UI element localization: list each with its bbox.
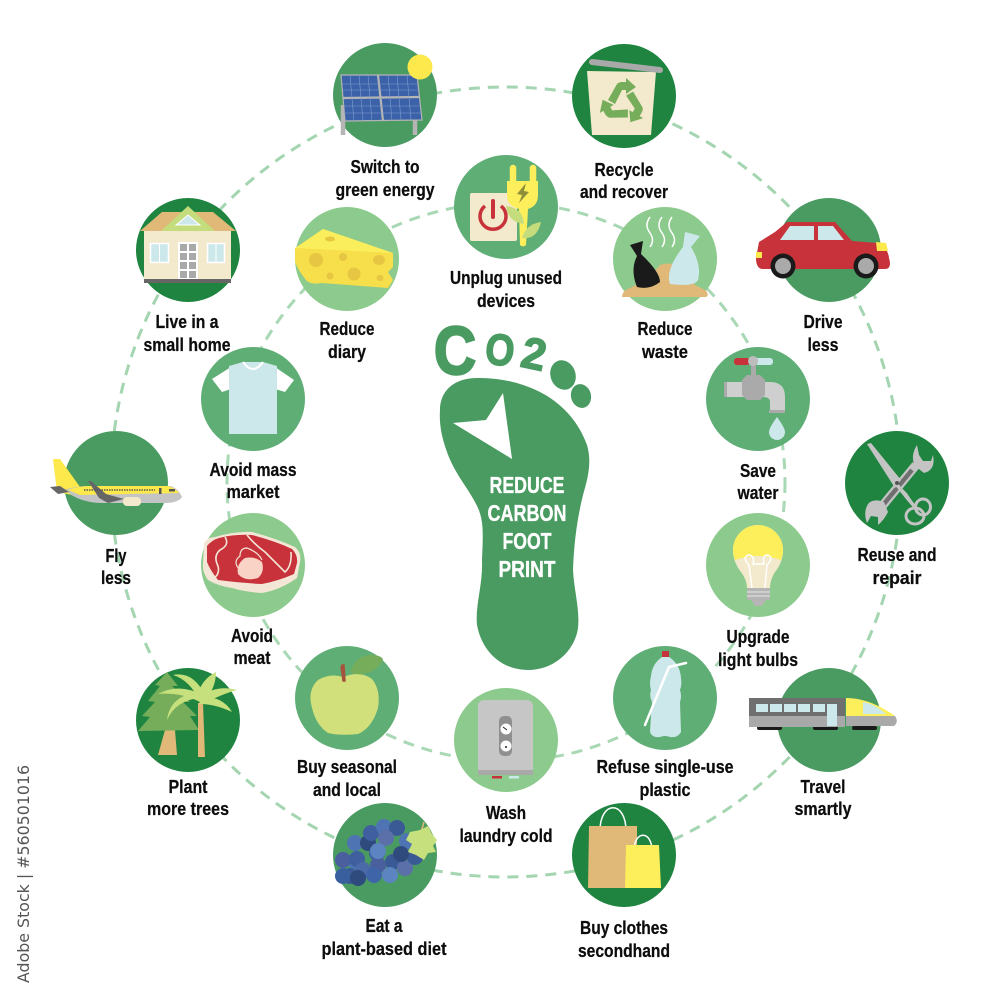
footprint text (488, 472, 566, 582)
central footprint: reduce carbon foot print (434, 313, 594, 670)
panel: fly less (50, 431, 182, 588)
icon: train (749, 668, 897, 772)
label (460, 803, 552, 846)
label (101, 546, 131, 588)
panel: recycle and recover (572, 44, 676, 202)
label: and local (313, 780, 381, 800)
label: Drive (804, 312, 842, 332)
label: Live in a (156, 312, 219, 332)
label: plant-based diet (322, 939, 447, 959)
icon: red car (756, 198, 890, 302)
icon: washing appliance (454, 688, 558, 792)
label: Refuse single-use (596, 757, 734, 777)
icon: cheese wedge (295, 207, 399, 311)
icon: toe small (568, 382, 594, 410)
icon: plastic bottle and straw (613, 646, 717, 750)
label: Buy clothes (580, 918, 668, 938)
label (144, 312, 230, 355)
label: Upgrade (726, 627, 790, 647)
panel: reduce waste (613, 207, 717, 362)
label: Avoid mass (210, 460, 296, 480)
icon: white arrow (453, 393, 512, 459)
icon: fir and palm trees (136, 668, 240, 772)
label: plastic (640, 780, 690, 800)
label: waste (641, 342, 688, 362)
icon: apple (295, 646, 399, 750)
label (718, 627, 798, 670)
footprint text: PRINT (498, 556, 556, 582)
panel: reduce diary (295, 207, 399, 362)
label: Reuse and (858, 545, 936, 565)
icon: steak (201, 513, 305, 617)
label (297, 757, 397, 800)
panel: live in a small home (136, 198, 240, 355)
CO2 heading: C (434, 313, 476, 389)
label (737, 461, 778, 503)
label (147, 777, 229, 819)
footprint text: CARBON (488, 500, 566, 526)
CO2 heading (434, 313, 551, 389)
icon: airplane (50, 431, 182, 535)
label: diary (328, 342, 366, 362)
label: Fly (106, 546, 126, 566)
label (450, 268, 562, 311)
footprint text: REDUCE (490, 472, 564, 498)
panel: buy seasonal and local (295, 646, 399, 800)
label: repair (872, 568, 922, 588)
label: laundry cold (460, 826, 552, 846)
icon: scissors and wrench (845, 431, 949, 535)
label (578, 918, 670, 961)
label: market (226, 482, 280, 502)
label (580, 160, 668, 202)
icon: power button and plug (454, 155, 558, 259)
panel: unplug unused devices (450, 155, 562, 311)
icon: t-shirt (201, 347, 305, 451)
label: Plant (168, 777, 208, 797)
label: and recover (580, 182, 668, 202)
icon: waste bags (613, 207, 717, 311)
panel: avoid mass market (201, 347, 305, 502)
panel: reuse and repair (845, 431, 949, 588)
panel: avoid meat (201, 513, 305, 668)
panel: plant more trees (136, 668, 240, 819)
label: devices (477, 291, 535, 311)
label: Unplug unused (450, 268, 562, 288)
label: Buy seasonal (297, 757, 397, 777)
label: Save (740, 461, 776, 481)
label: Recycle (594, 160, 654, 180)
icon: house (136, 198, 240, 302)
label (858, 545, 936, 588)
icon: solar panel (333, 43, 437, 147)
label (231, 626, 273, 668)
label (804, 312, 842, 355)
label (322, 916, 447, 959)
label: Reduce (638, 319, 692, 339)
icon: footprint sole (440, 378, 589, 670)
label (638, 319, 692, 362)
panel: drive less (756, 198, 890, 355)
label: water (737, 483, 778, 503)
panel: switch to green energy (333, 43, 437, 200)
label: green energy (336, 180, 434, 200)
panel: save water (706, 347, 810, 503)
icon: recycling bin (572, 44, 676, 148)
label (320, 319, 374, 362)
label: Switch to (350, 157, 420, 177)
panel: travel smartly (749, 668, 897, 819)
icon: shopping bags (572, 803, 676, 907)
CO2 heading: 2 (517, 328, 551, 381)
label: small home (144, 335, 230, 355)
label: less (808, 335, 838, 355)
icon: water tap (706, 347, 810, 451)
stock credit text: Adobe Stock | #560501016 (14, 765, 33, 983)
label: Wash (486, 803, 526, 823)
icon: light bulb (706, 513, 810, 617)
panel: buy clothes secondhand (572, 803, 676, 961)
label: light bulbs (718, 650, 798, 670)
label: Reduce (320, 319, 374, 339)
label: Avoid (231, 626, 273, 646)
label: smartly (794, 799, 852, 819)
icon: grapes (333, 803, 437, 907)
panel: wash laundry cold (454, 688, 558, 846)
panel: eat a plant-based diet (322, 803, 447, 959)
panel: refuse single-use plastic (596, 646, 734, 800)
label: Travel (800, 777, 846, 797)
label (596, 757, 734, 800)
footprint text: FOOT (502, 528, 552, 554)
label: secondhand (578, 941, 670, 961)
label (794, 777, 852, 819)
CO2 heading: O (483, 325, 517, 376)
label: Eat a (366, 916, 403, 936)
icon: toe large (546, 357, 580, 393)
label: meat (234, 648, 270, 668)
label (336, 157, 434, 200)
label (210, 460, 296, 502)
label: more trees (147, 799, 229, 819)
label: less (101, 568, 131, 588)
panel: upgrade light bulbs (706, 513, 810, 670)
